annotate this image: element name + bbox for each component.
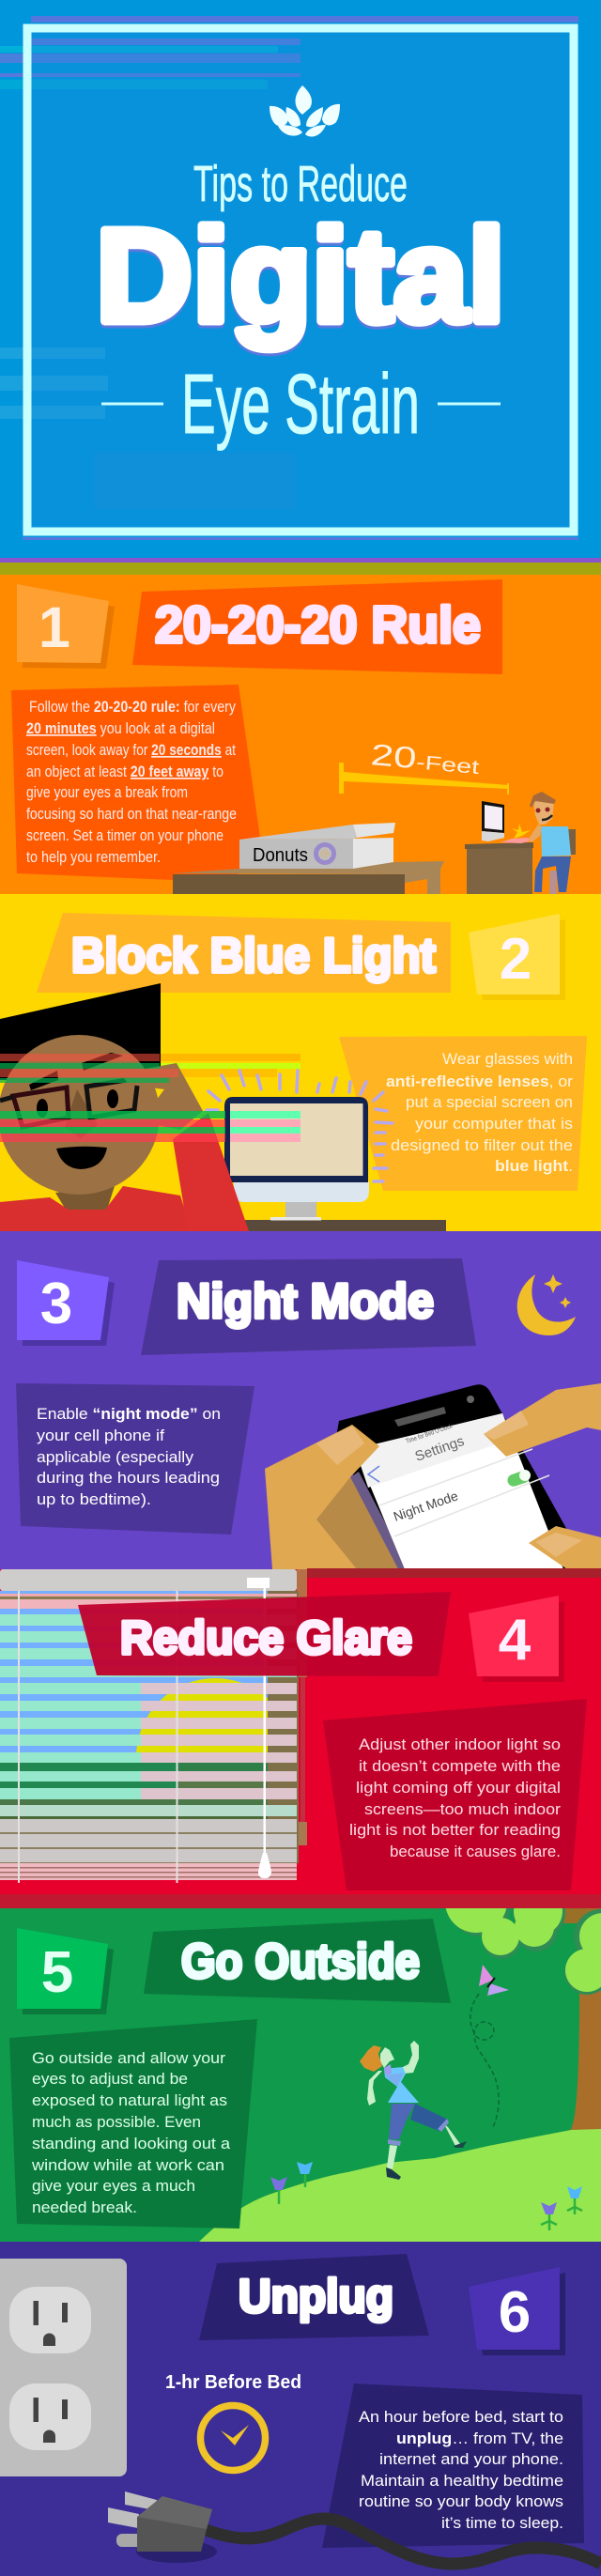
panel: night mode	[0, 1231, 601, 1569]
panel: reduce glare	[0, 1568, 601, 1908]
title banner	[144, 1919, 451, 2003]
heading: digital: Digital	[96, 201, 505, 349]
tile number 4	[469, 1596, 564, 1682]
title banner: Night Mode	[177, 1274, 434, 1329]
ruler: 20 feet	[339, 737, 509, 794]
text block	[16, 1383, 254, 1535]
text block: Follow the 20-20-20 rule: for every	[29, 698, 236, 716]
panel: unplug	[0, 2242, 601, 2576]
text block: put a special screen on	[406, 1093, 573, 1111]
butterfly with dashed path	[470, 1965, 509, 2129]
ruler: 20 feet: 20 -Feet	[369, 737, 481, 780]
text block: Adjust other indoor light so	[359, 1735, 561, 1753]
panel: header	[0, 0, 601, 563]
tile number 6: 6	[499, 2280, 531, 2345]
panel: 20-20-20 rule	[0, 558, 601, 894]
plug and cord	[108, 2491, 601, 2564]
title banner	[78, 1592, 451, 1676]
text block: an object at least 20 feet away to	[26, 763, 223, 780]
hands	[265, 1383, 601, 1569]
text block: your computer that is	[415, 1115, 573, 1133]
donut box	[239, 823, 395, 869]
phone: Settings	[413, 1433, 467, 1465]
text block: up to bedtime).	[37, 1490, 151, 1508]
worker	[529, 792, 576, 894]
title banner	[199, 2254, 429, 2340]
text block: Maintain a healthy bedtime	[361, 2472, 563, 2490]
text block: your cell phone if	[37, 1427, 164, 1444]
tile number 5: 5	[41, 1940, 73, 2005]
text block: much as possible. Even	[32, 2113, 201, 2131]
desk and worker	[465, 792, 576, 894]
panel: block blue light	[0, 894, 601, 1231]
text block: standing and looking out a	[32, 2135, 231, 2152]
text block: Go outside and allow your	[32, 2049, 225, 2067]
monitor with rays	[207, 1071, 446, 1231]
tile number 5	[17, 1928, 114, 2014]
text block	[11, 685, 260, 880]
tile number 1: 1	[39, 595, 70, 659]
text block: give your eyes a much	[32, 2177, 195, 2195]
text block: window while at work can	[31, 2156, 224, 2174]
icon: lotus logo	[270, 85, 340, 137]
decorative frame	[27, 28, 574, 532]
text block: anti-reflective lenses , or	[386, 1072, 573, 1090]
icon: moon and stars	[517, 1274, 576, 1335]
tile number 4: 4	[499, 1608, 532, 1673]
title banner: Reduce Glare	[120, 1612, 412, 1664]
panel: go outside	[0, 1908, 601, 2242]
text block	[9, 2019, 257, 2229]
title banner: 20-20-20 Rule	[155, 595, 481, 654]
hill	[199, 2129, 601, 2242]
tree	[445, 1908, 601, 2130]
text block: applicable (especially	[37, 1448, 194, 1466]
text block: eyes to adjust and be	[32, 2070, 188, 2088]
woman walking	[360, 2041, 467, 2180]
title banner	[141, 1258, 476, 1355]
text block: exposed to natural light as	[32, 2091, 227, 2109]
text block	[322, 2383, 584, 2548]
text block: Enable “night mode” on	[37, 1405, 221, 1423]
text block: unplug… from TV, the	[396, 2429, 563, 2447]
phone: Time for Bed O'Clock	[405, 1423, 454, 1445]
text block: 20 minutes you look at a digital	[26, 719, 215, 737]
text block: light coming off your digital	[356, 1779, 561, 1797]
tile number 1	[17, 584, 115, 669]
tile number 3	[17, 1260, 115, 1346]
character with glasses	[0, 983, 249, 1231]
text block: because it causes glare.	[390, 1843, 561, 1860]
text block: to help you remember.	[26, 848, 161, 866]
text block: blue light.	[495, 1157, 573, 1175]
window blinds	[0, 1569, 307, 1883]
table	[173, 861, 444, 894]
text block: focusing so hard on that near-range	[26, 805, 237, 823]
text block: give your eyes a break from	[26, 783, 188, 801]
text block: designed to filter out the	[391, 1136, 573, 1154]
heading: eye strain: Eye Strain	[181, 358, 420, 452]
text block: light is not better for reading	[349, 1821, 561, 1839]
wall outlet	[0, 2259, 127, 2476]
text block: during the hours leading	[37, 1469, 220, 1487]
text block: needed break.	[32, 2198, 137, 2216]
title banner	[37, 913, 451, 993]
phone: Night Mode	[392, 1488, 460, 1524]
phone in hands	[265, 1383, 601, 1569]
tile number 2	[469, 914, 565, 1000]
text block: screen, look away for 20 seconds at	[26, 741, 236, 759]
phone	[336, 1384, 575, 1569]
text block: An hour before bed, start to	[359, 2408, 563, 2426]
tile number 3: 3	[40, 1272, 72, 1336]
text block	[323, 1699, 587, 1890]
label: 1-hr before bed: 1-hr Before Bed	[165, 2372, 301, 2393]
title banner	[132, 579, 502, 674]
title banner: Block Blue Light	[71, 929, 436, 983]
flowers	[270, 2162, 582, 2230]
text block: it’s time to sleep.	[441, 2514, 563, 2532]
text block: it doesn’t compete with the	[359, 1757, 561, 1775]
heading: tips to reduce: Tips to Reduce	[193, 156, 408, 212]
icon: clock	[201, 2406, 265, 2470]
text block: Wear glasses with	[442, 1050, 573, 1068]
title banner: Unplug	[239, 2270, 393, 2322]
text block: screen. Set a timer on your phone	[26, 826, 223, 844]
text block	[339, 1036, 587, 1191]
tile number 6	[469, 2267, 565, 2355]
tile number 2: 2	[500, 927, 532, 992]
text block: routine so your body knows	[359, 2492, 563, 2510]
text block: internet and your phone.	[379, 2450, 563, 2468]
title banner: Go Outside	[181, 1935, 420, 1989]
donut box: Donuts	[253, 845, 308, 866]
text block: screens—too much indoor	[364, 1800, 561, 1818]
